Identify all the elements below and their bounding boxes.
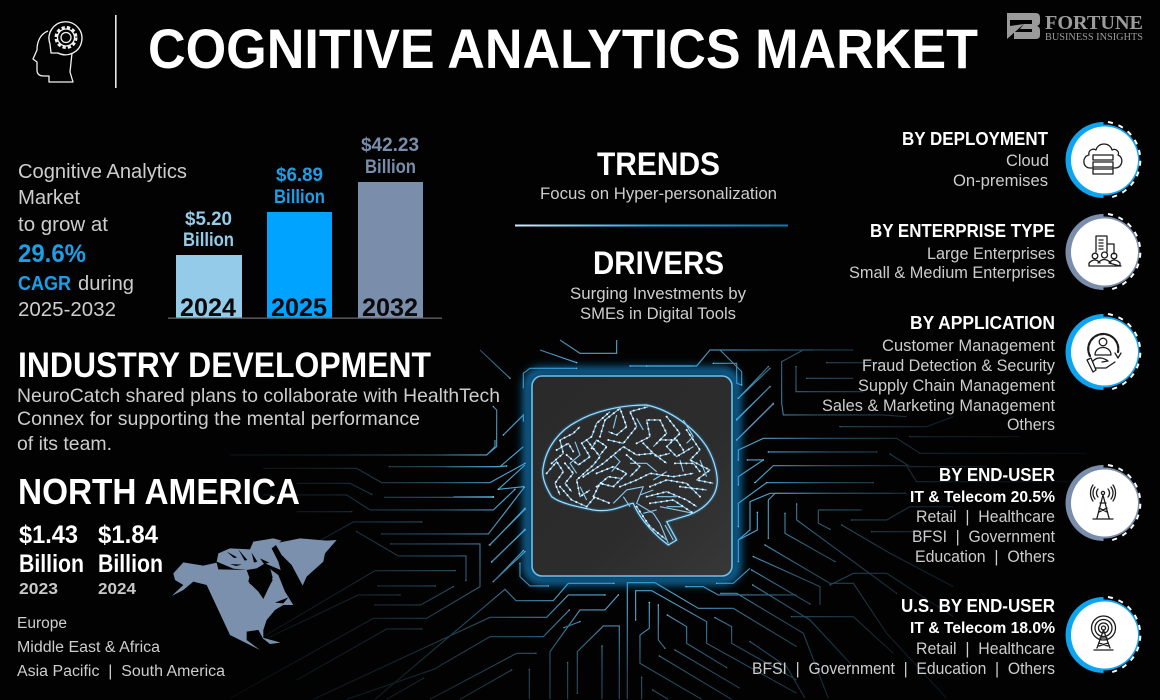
- bar 2025: Billion: [274, 187, 325, 208]
- logo wordmark: FORTUNE: [1045, 13, 1143, 34]
- bar 2032: [358, 135, 423, 322]
- map: north america: [172, 538, 337, 650]
- CAGR text block: during: [78, 272, 134, 295]
- industry development: [17, 346, 500, 455]
- icon: brain: [543, 405, 717, 545]
- north america 2024 value: [98, 521, 163, 598]
- icon: U.S. signal tower badge: [1066, 597, 1140, 673]
- header divider: [115, 15, 117, 88]
- segment: by end-user: BFSI | Government: [912, 528, 1055, 546]
- segment: by end-user: IT & Telecom 20.5%: [910, 489, 1055, 506]
- CAGR text block: Cognitive Analytics: [18, 160, 187, 183]
- chip glow: [528, 372, 736, 580]
- title: COGNITIVE ANALYTICS MARKET: [148, 17, 978, 80]
- segment: by enterprise type: Large Enterprises: [927, 245, 1055, 263]
- segment: by deployment: On-premises: [953, 172, 1048, 190]
- segment: U.S. by end-user: IT & Telecom 18.0%: [910, 620, 1055, 637]
- other regions list: Europe: [17, 615, 67, 632]
- segment: by end-user: Retail | Healthcare: [916, 508, 1055, 526]
- industry development: INDUSTRY DEVELOPMENT: [18, 346, 431, 385]
- bar 2024: Billion: [183, 230, 234, 251]
- bar 2024: [176, 209, 242, 322]
- other regions list: Asia Pacific | South America: [17, 663, 225, 680]
- bar 2024: $5.20: [185, 209, 232, 230]
- segment: by application: Others: [1007, 416, 1055, 434]
- industry development: NeuroCatch shared plans to collaborate with HealthTech: [17, 385, 500, 407]
- bar 2032: Billion: [365, 157, 416, 178]
- segment: U.S. by end-user: Retail | Healthcare: [916, 640, 1055, 658]
- segment: U.S. by end-user: [752, 596, 1055, 678]
- other regions list: Middle East & Africa: [17, 639, 160, 656]
- header icon: head with gear: [33, 22, 82, 82]
- icon: customer care hand badge: [1066, 314, 1140, 390]
- circuit board traces: [230, 340, 1087, 699]
- trends block: TRENDS: [597, 146, 720, 182]
- segment: by enterprise type: BY ENTERPRISE TYPE: [870, 221, 1055, 241]
- north america 2023 value: 2023: [19, 581, 58, 598]
- segment: by application: Supply Chain Management: [858, 377, 1055, 395]
- trends block: Focus on Hyper-personalization: [540, 185, 777, 203]
- segment: by deployment: [902, 129, 1049, 190]
- CAGR text block: 29.6%: [18, 240, 86, 268]
- bar 2032: $42.23: [361, 135, 419, 156]
- segment: by application: [822, 313, 1056, 434]
- north america heading: NORTH AMERICA: [18, 471, 300, 512]
- segment: U.S. by end-user: U.S. BY END-USER: [901, 596, 1055, 616]
- segment: U.S. by end-user: BFSI | Government | Education | Others: [752, 660, 1055, 678]
- drivers block: [570, 245, 747, 323]
- drivers block: Surging Investments by: [570, 285, 747, 303]
- segment: by enterprise type: [849, 221, 1055, 282]
- segment: by deployment: Cloud: [1006, 152, 1049, 170]
- other regions list: [17, 615, 225, 680]
- trends block: [540, 146, 777, 203]
- CAGR text block: CAGR: [18, 272, 71, 295]
- rule between trends and drivers: [515, 224, 788, 226]
- CAGR text block: to grow at: [18, 213, 108, 236]
- segment: by enterprise type: Small & Medium Enterprises: [849, 264, 1055, 282]
- CAGR text block: Market: [18, 186, 80, 209]
- bar 2025: $6.89: [276, 165, 323, 186]
- north america 2023 value: [19, 521, 84, 598]
- north america 2024 value: Billion: [98, 550, 163, 578]
- segment: by end-user: Education | Others: [915, 548, 1055, 566]
- industry development: of its team.: [17, 433, 112, 455]
- bar 2032: 2032: [362, 294, 418, 322]
- icon: building with people badge: [1066, 214, 1140, 290]
- north america 2023 value: $1.43: [19, 521, 78, 549]
- logo: Fortune Business Insights: BUSINESS INSIGHTS: [1045, 32, 1143, 43]
- icon: cloud server badge: [1066, 122, 1140, 198]
- segment: by deployment: BY DEPLOYMENT: [902, 129, 1048, 149]
- segment: by application: Sales & Marketing Management: [822, 397, 1055, 415]
- north america 2024 value: 2024: [98, 581, 136, 598]
- bar 2025: [267, 165, 332, 322]
- segment: by application: BY APPLICATION: [910, 313, 1055, 333]
- drivers block: SMEs in Digital Tools: [580, 305, 736, 323]
- segment: by application: Customer Management: [882, 337, 1055, 355]
- bar 2024: 2024: [180, 294, 236, 322]
- bar 2025: 2025: [271, 294, 327, 322]
- logo mark: [1007, 13, 1040, 39]
- CAGR text block: [18, 160, 187, 321]
- drivers block: DRIVERS: [593, 245, 724, 281]
- icon: telecom tower badge: [1066, 465, 1140, 541]
- circuit chip with brain: [528, 372, 736, 580]
- segment: by application: Fraud Detection & Security: [862, 357, 1056, 375]
- north america 2024 value: $1.84: [98, 521, 158, 549]
- bar chart: market size: [168, 135, 442, 322]
- segment: by end-user: BY END-USER: [939, 465, 1055, 485]
- chip body: [532, 376, 732, 576]
- north america 2023 value: Billion: [19, 550, 84, 578]
- segment: by end-user: [910, 465, 1055, 566]
- CAGR text block: 2025-2032: [18, 298, 116, 321]
- industry development: Connex for supporting the mental performance: [17, 408, 420, 430]
- logo: Fortune Business Insights: [1007, 13, 1143, 43]
